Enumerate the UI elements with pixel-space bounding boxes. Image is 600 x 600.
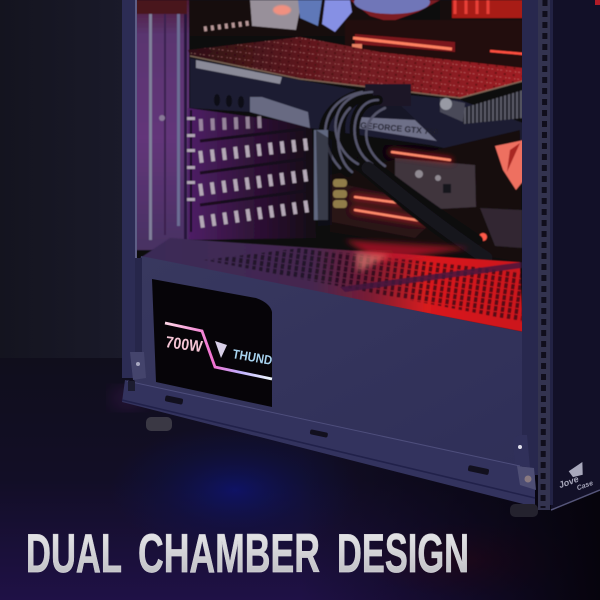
GeForce badge	[357, 117, 439, 141]
case logo	[554, 461, 594, 498]
red RAM modules top	[440, 0, 524, 49]
left case pillar	[122, 0, 146, 380]
PSU shroud top	[140, 238, 523, 332]
motherboard logo glow	[495, 140, 524, 190]
desk surface	[0, 358, 600, 600]
PCI expansion slots	[187, 108, 316, 240]
right side panel	[550, 0, 600, 510]
Thunder label: THUND	[231, 346, 273, 368]
GeForce badge: GEFORCE GTX 760	[360, 120, 439, 137]
heatsink fins	[463, 90, 523, 124]
case foot right	[510, 504, 538, 517]
PSU window	[152, 279, 273, 407]
PSU shroud front face	[134, 256, 523, 470]
brand logo	[215, 341, 227, 358]
RGB light line	[165, 323, 272, 379]
title	[26, 522, 469, 584]
title: DESIGN	[337, 522, 469, 584]
graphics card PCB	[188, 37, 523, 98]
cable bundle	[324, 84, 486, 258]
700W label: 700W	[164, 334, 204, 356]
background wall	[0, 0, 130, 362]
case bottom rail	[122, 380, 535, 507]
drive bracket	[314, 130, 328, 220]
right pillar	[513, 0, 550, 510]
motherboard upper with glowing strips	[345, 20, 524, 70]
case logo: Jove	[557, 474, 580, 490]
graphics card shroud	[190, 58, 523, 165]
case interior	[135, 0, 525, 300]
case foot left	[146, 417, 172, 431]
case logo: Case	[576, 480, 594, 492]
motherboard lower	[330, 130, 522, 262]
CPU cooler and fan	[190, 0, 440, 36]
title: CHAMBER	[138, 522, 320, 584]
glowing red memory strips	[355, 152, 487, 241]
rear panel	[135, 0, 189, 250]
title: DUAL	[26, 522, 122, 584]
